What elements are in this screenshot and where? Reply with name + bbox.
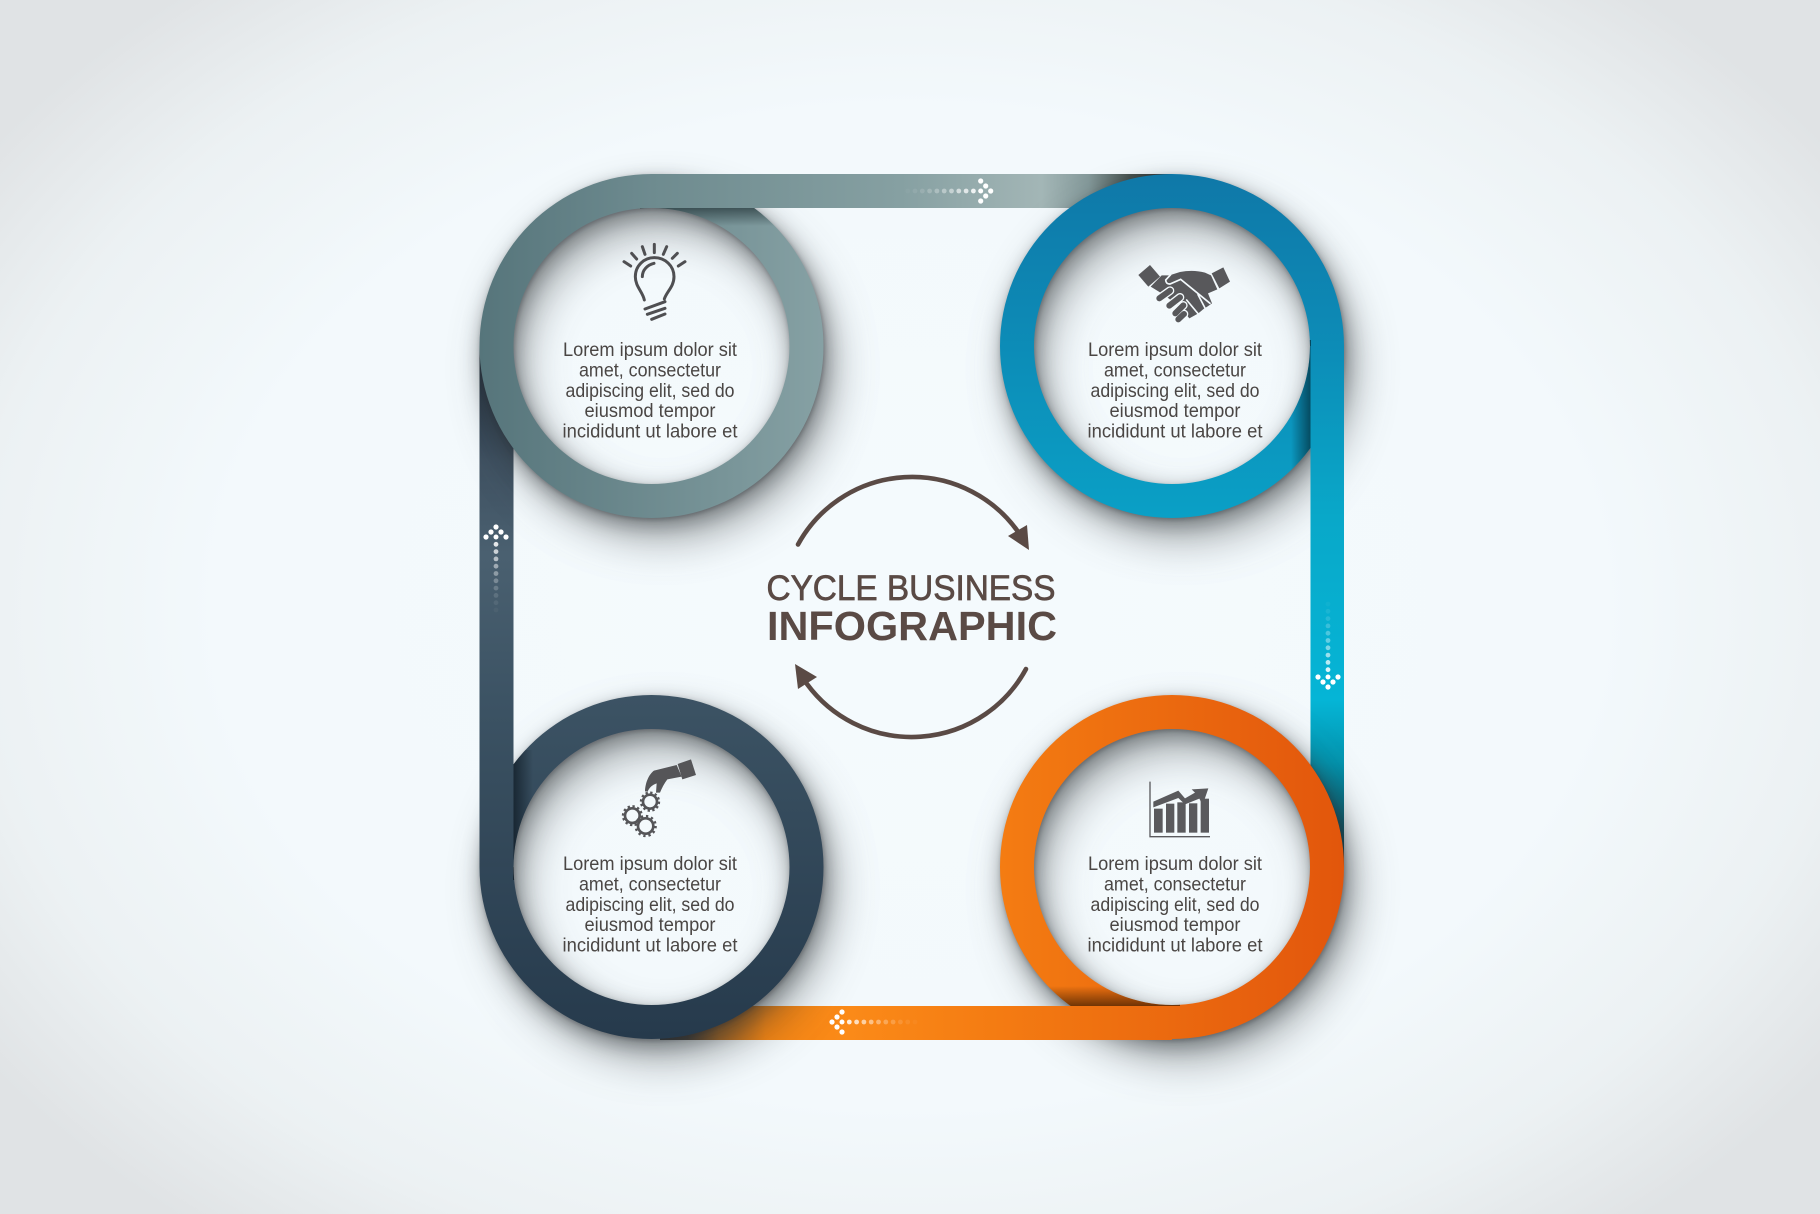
text block: adipiscing elit, sed do — [566, 895, 734, 916]
fold shadow on blue ring — [1291, 340, 1311, 470]
text block — [562, 340, 738, 442]
arrow: dotted up — [483, 524, 509, 612]
text block: eiusmod tempor — [1110, 915, 1241, 936]
text block — [1088, 854, 1263, 956]
text block — [1088, 340, 1263, 442]
text block: incididunt ut labore et — [562, 422, 738, 442]
text block: incididunt ut labore et — [562, 936, 738, 956]
band: bottom connector, near section with left arrow — [829, 1006, 1172, 1040]
orange ring — [1000, 695, 1344, 1039]
text block — [562, 854, 738, 956]
icon: light bulb — [624, 244, 685, 319]
navy ring — [480, 695, 824, 1039]
arrow: dotted down — [1315, 602, 1341, 690]
text block: eiusmod tempor — [584, 915, 716, 936]
panel: step 3 orange ring — [1000, 695, 1344, 1039]
text block: incididunt ut labore et — [1088, 422, 1263, 442]
title — [766, 569, 1057, 649]
blue ring — [1000, 174, 1344, 518]
text block: amet, consectetur — [579, 360, 722, 382]
text block: amet, consectetur — [579, 874, 722, 896]
text block: Lorem ipsum dolor sit — [1088, 340, 1263, 361]
text block: adipiscing elit, sed do — [566, 381, 734, 402]
arrow: top arc — [798, 477, 1029, 550]
text block: Lorem ipsum dolor sit — [1088, 854, 1263, 875]
text block: Lorem ipsum dolor sit — [563, 854, 738, 875]
band: top connector with right arrow — [651, 174, 1172, 208]
text block: amet, consectetur — [1104, 874, 1247, 896]
text block: amet, consectetur — [1104, 360, 1247, 382]
arrow: dotted right — [905, 178, 993, 204]
text block: adipiscing elit, sed do — [1090, 895, 1260, 916]
panel: step 1 grey-green ring — [480, 174, 824, 518]
icon: growth chart — [1150, 782, 1210, 837]
text block: eiusmod tempor — [1110, 401, 1241, 422]
text block: adipiscing elit, sed do — [1090, 381, 1260, 402]
band: bottom connector, far section under navy ring — [660, 1006, 1000, 1040]
text block: eiusmod tempor — [584, 401, 716, 422]
band: right connector with down arrow — [1310, 346, 1344, 867]
fold shadow on navy ring — [513, 750, 530, 880]
panel: step 2 blue ring — [1000, 174, 1344, 518]
fold shadow on grey-green ring — [640, 208, 772, 224]
arrow: dotted left — [829, 1009, 917, 1035]
band: left connector with up arrow — [480, 346, 514, 867]
icon: handshake — [1138, 265, 1230, 319]
center cycle arrows — [795, 477, 1029, 737]
title: INFOGRAPHIC — [767, 603, 1057, 649]
icon: hand and gears — [623, 759, 696, 836]
grey-green ring — [480, 174, 824, 518]
text block: incididunt ut labore et — [1088, 936, 1263, 956]
title: CYCLE BUSINESS — [766, 569, 1056, 608]
text block: Lorem ipsum dolor sit — [563, 340, 738, 361]
panel: step 4 navy ring — [480, 695, 824, 1039]
arrow: bottom arc — [795, 664, 1026, 737]
fold shadow on orange ring — [1050, 988, 1180, 1006]
